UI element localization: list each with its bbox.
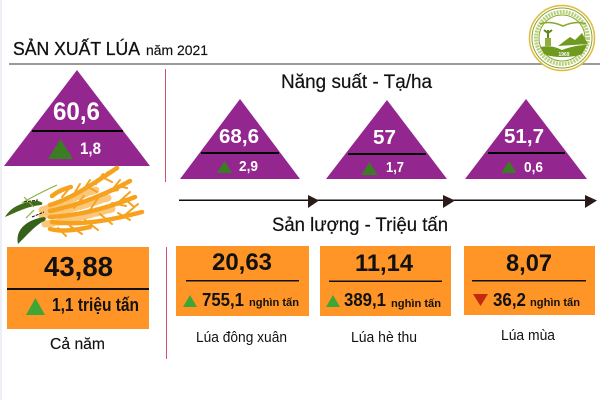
title: năm 2021	[146, 43, 208, 58]
panel: all year output	[7, 247, 149, 329]
panel: all year output: 1,1 triệu tấn	[52, 295, 139, 315]
label: main season: Lúa mùa	[501, 327, 556, 344]
label: summer-autumn: Lúa hè thu	[351, 329, 417, 346]
title: SẢN XUẤT LÚA	[13, 38, 140, 59]
panel: winter-spring output	[176, 246, 309, 316]
divider: lower	[166, 247, 167, 359]
title	[13, 38, 208, 59]
icon: rice stalks	[5, 168, 142, 244]
icon: university logo: 1969	[558, 52, 570, 58]
triangle: all year yield: 60,6	[53, 98, 100, 126]
panel: main season output: 8,07	[506, 250, 552, 277]
triangle: main season yield: 0,6	[524, 160, 543, 176]
panel: main season output: nghìn tấn	[530, 297, 580, 309]
panel: main season output	[464, 246, 595, 315]
panel: winter-spring output: 20,63	[212, 249, 272, 276]
panel: winter-spring output: nghìn tấn	[249, 297, 299, 309]
heading: yield: Năng suất - Tạ/ha	[281, 72, 432, 93]
divider: upper	[165, 69, 166, 182]
panel: all year output: 43,88	[44, 251, 113, 282]
triangle: main season yield	[465, 99, 587, 179]
panel: winter-spring output: 755,1	[202, 290, 244, 310]
panel: summer-autumn output: nghìn tấn	[391, 298, 441, 310]
icon: university logo	[530, 6, 594, 70]
triangle: summer-autumn yield: 57	[373, 126, 396, 149]
triangle: all year yield: 1,8	[80, 139, 101, 158]
panel: summer-autumn output	[320, 246, 451, 316]
triangle: winter-spring yield: 68,6	[219, 125, 259, 148]
label: all year: Cả năm	[50, 336, 105, 353]
triangle: main season yield: 51,7	[504, 125, 544, 148]
panel: summer-autumn output: 389,1	[344, 290, 386, 310]
label: winter-spring: Lúa đông xuân	[196, 329, 287, 346]
panel: summer-autumn output: 11,14	[355, 250, 414, 277]
triangle: summer-autumn yield: 1,7	[386, 160, 404, 176]
timeline arrows	[179, 195, 597, 208]
triangle: all year yield	[4, 70, 150, 166]
panel: main season output: 36,2	[493, 290, 526, 310]
heading: output: Sản lượng - Triệu tấn	[272, 215, 448, 236]
triangle: summer-autumn yield	[326, 100, 447, 179]
triangle: winter-spring yield	[180, 99, 300, 179]
triangle: winter-spring yield: 2,9	[239, 159, 258, 175]
